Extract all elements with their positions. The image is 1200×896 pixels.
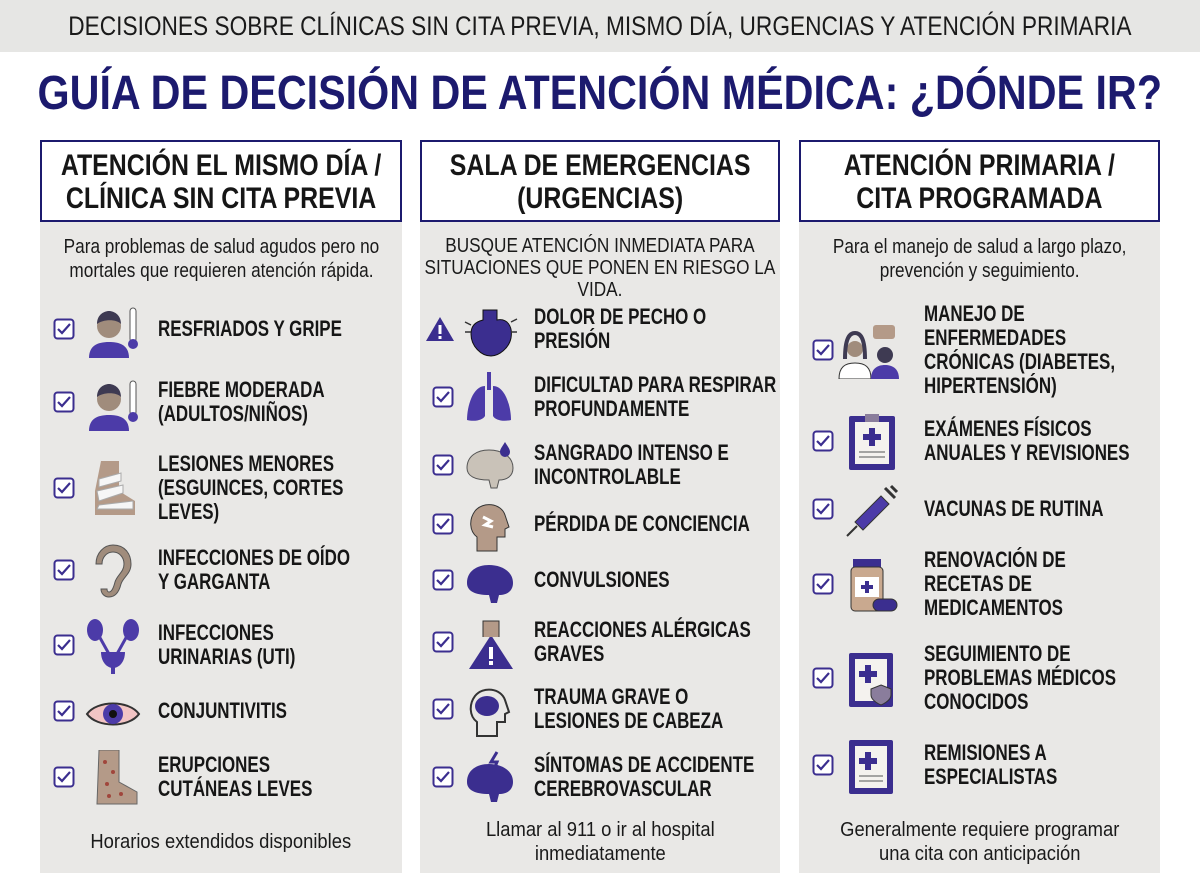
- panel: primary care: MANEJO DE: [924, 301, 1025, 326]
- item: erupciones: [54, 750, 312, 804]
- item: trauma: TRAUMA GRAVE O: [534, 684, 688, 709]
- item: vacunas: VACUNAS DE RUTINA: [924, 496, 1103, 521]
- description: emergency: SITUACIONES QUE PONEN EN RIESGO LA: [425, 257, 775, 279]
- item: respirar: PROFUNDAMENTE: [534, 396, 689, 421]
- footer: same day: Horarios extendidos disponibles: [91, 831, 351, 853]
- description: same day: [63, 236, 379, 282]
- item: oido: Y GARGANTA: [158, 569, 270, 594]
- footer: primary care: Generalmente requiere programar: [840, 819, 1119, 841]
- heading: emergency: [420, 140, 780, 222]
- panel: primary care: [799, 140, 1160, 873]
- item: trauma: [432, 684, 723, 737]
- item: vacunas: [812, 485, 1103, 537]
- item: respirar: DIFICULTAD PARA RESPIRAR: [534, 372, 776, 397]
- item: accidente cerebrovascular: [432, 751, 754, 802]
- top banner: [0, 0, 1200, 52]
- item: convulsiones: [432, 565, 670, 603]
- item: seguimiento: PROBLEMAS MÉDICOS: [924, 665, 1116, 690]
- item: erupciones: ERUPCIONES: [158, 752, 270, 777]
- item: dolor pecho: [426, 304, 706, 356]
- item: sangrado: SANGRADO INTENSO E: [534, 440, 729, 465]
- item: cronicas: CRÓNICAS (DIABETES,: [924, 349, 1115, 374]
- item: oido: INFECCIONES DE OÍDO: [158, 545, 350, 570]
- item: alergicas: REACCIONES ALÉRGICAS: [534, 617, 751, 642]
- top banner: DECISIONES SOBRE CLÍNICAS SIN CITA PREVIA, MISMO DÍA, URGENCIAS Y ATENCIÓN PRIMARIA: [68, 11, 1132, 41]
- heading: emergency: (URGENCIAS): [517, 182, 683, 215]
- heading: primary care: [799, 140, 1160, 222]
- item: remisiones: REMISIONES A: [924, 740, 1047, 765]
- item: accidente cerebrovascular: CEREBROVASCULAR: [534, 776, 712, 801]
- panel: primary care: HIPERTENSIÓN): [924, 373, 1057, 398]
- item: erupciones: CUTÁNEAS LEVES: [158, 776, 312, 801]
- item: dolor pecho: PRESIÓN: [534, 328, 610, 353]
- item: examenes: ANUALES Y REVISIONES: [924, 440, 1130, 465]
- item: trauma: LESIONES DE CABEZA: [534, 708, 723, 733]
- footer: emergency: inmediatamente: [535, 843, 665, 865]
- description: same day: mortales que requieren atención rápida.: [69, 260, 373, 282]
- panel: same day clinic: [40, 140, 402, 873]
- description: same day: Para problemas de salud agudos pero no: [63, 236, 379, 258]
- item: recetas: [812, 547, 1066, 620]
- footer: primary care: una cita con anticipación: [879, 843, 1080, 865]
- description: primary care: [833, 236, 1126, 282]
- item: cronicas: [812, 301, 1115, 398]
- heading: emergency: SALA DE EMERGENCIAS: [450, 149, 750, 182]
- item: lesiones: LESIONES MENORES: [158, 451, 334, 476]
- item: examenes: EXÁMENES FÍSICOS: [924, 416, 1092, 441]
- item: respirar: [432, 372, 776, 421]
- item: resfriados: RESFRIADOS Y GRIPE: [158, 316, 342, 341]
- item: recetas: RECETAS DE: [924, 571, 1032, 596]
- item: recetas: RENOVACIÓN DE: [924, 547, 1066, 572]
- item: dolor pecho: DOLOR DE PECHO O: [534, 304, 706, 329]
- description: emergency: BUSQUE ATENCIÓN INMEDIATA PARA: [445, 235, 755, 257]
- heading: primary care: ATENCIÓN PRIMARIA /: [844, 149, 1115, 182]
- description: emergency: VIDA.: [578, 279, 622, 301]
- heading: same day: CLÍNICA SIN CITA PREVIA: [66, 182, 376, 215]
- item: conciencia: [432, 504, 750, 552]
- item: alergicas: [432, 617, 751, 669]
- item: remisiones: ESPECIALISTAS: [924, 764, 1057, 789]
- item: lesiones: [54, 451, 343, 524]
- item: cronicas: ENFERMEDADES: [924, 325, 1066, 350]
- item: conciencia: PÉRDIDA DE CONCIENCIA: [534, 511, 750, 536]
- item: lesiones: LEVES): [158, 499, 219, 524]
- item: lesiones: (ESGUINCES, CORTES: [158, 475, 343, 500]
- item: resfriados: [54, 308, 342, 358]
- item: fiebre: (ADULTOS/NIÑOS): [158, 401, 308, 426]
- item: remisiones: [812, 740, 1057, 794]
- item: urinarias: INFECCIONES: [158, 620, 274, 645]
- item: seguimiento: [812, 641, 1116, 714]
- item: alergicas: GRAVES: [534, 641, 604, 666]
- item: fiebre: [54, 377, 325, 431]
- heading: primary care: CITA PROGRAMADA: [856, 182, 1103, 215]
- heading: same day: ATENCIÓN EL MISMO DÍA /: [61, 149, 381, 182]
- footer: emergency: Llamar al 911 o ir al hospital: [486, 819, 714, 841]
- item: fiebre: FIEBRE MODERADA: [158, 377, 325, 402]
- item: convulsiones: CONVULSIONES: [534, 567, 670, 592]
- item: conjuntivitis: CONJUNTIVITIS: [158, 698, 287, 723]
- description: emergency: [425, 234, 776, 301]
- item: seguimiento: SEGUIMIENTO DE: [924, 641, 1071, 666]
- item: seguimiento: CONOCIDOS: [924, 689, 1028, 714]
- item: examenes: [812, 414, 1130, 470]
- item: urinarias: [54, 619, 295, 674]
- item: urinarias: URINARIAS (UTI): [158, 644, 295, 669]
- heading: same day: [40, 140, 402, 222]
- item: conjuntivitis: [54, 698, 287, 726]
- item: recetas: MEDICAMENTOS: [924, 595, 1063, 620]
- panel: emergency: [420, 140, 780, 873]
- footer: primary care: [840, 819, 1120, 865]
- description: primary care: Para el manejo de salud a largo plazo,: [833, 236, 1126, 258]
- description: primary care: prevención y seguimiento.: [880, 260, 1079, 282]
- item: sangrado: INCONTROLABLE: [534, 464, 681, 489]
- title: GUÍA DE DECISIÓN DE ATENCIÓN MÉDICA: ¿DÓNDE IR?: [38, 67, 1162, 120]
- item: sangrado: [432, 440, 729, 489]
- item: accidente cerebrovascular: SÍNTOMAS DE ACCIDENTE: [534, 752, 754, 777]
- item: oido: [54, 544, 350, 598]
- footer: emergency: [486, 819, 714, 865]
